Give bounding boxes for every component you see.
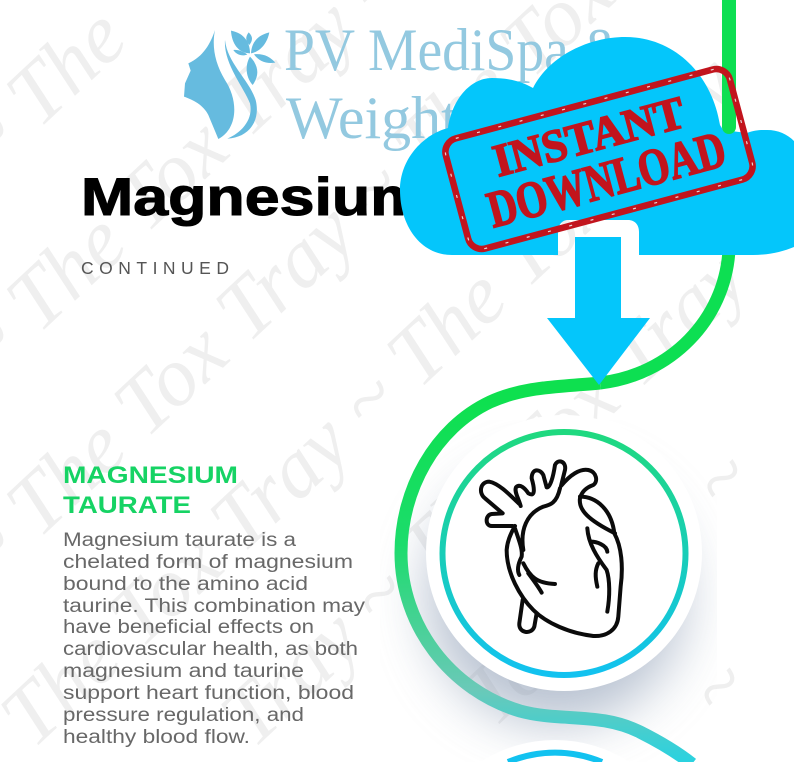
section heading: magnesium taurate: TAURATE xyxy=(63,492,191,519)
circle drop shadow xyxy=(428,468,684,724)
next circle: partial xyxy=(480,740,630,762)
body text: bound to the amino acid xyxy=(63,574,308,595)
stamp: instant download xyxy=(442,66,756,252)
body text xyxy=(63,530,366,748)
heart circle xyxy=(426,415,702,691)
connector line: over cloud end xyxy=(722,0,736,127)
body text: taurine. This combination may xyxy=(63,596,366,617)
logo wordmark line 1: PV MediSpa & xyxy=(284,17,626,83)
watermark pattern: Tox Tray ~ xyxy=(444,429,770,743)
section heading: magnesium taurate: MAGNESIUM xyxy=(63,462,238,489)
stamp: instant download: DOWNLOAD xyxy=(482,121,732,239)
body text: have beneficial effects on xyxy=(63,617,314,638)
body text: magnesium and taurine xyxy=(63,661,304,682)
watermark pattern: ~ xyxy=(671,638,767,737)
logo: PV MediSpa xyxy=(184,17,626,151)
icon: face and leaves xyxy=(184,30,275,139)
instant download badge xyxy=(400,0,794,385)
body text: pressure regulation, and xyxy=(63,705,304,726)
icon: cloud xyxy=(400,37,794,255)
body text: healthy blood flow. xyxy=(63,727,250,748)
body text: support heart function, blood xyxy=(63,683,354,704)
logo wordmark line 2: Weight Loss xyxy=(286,85,586,151)
subtitle: CONTINUED xyxy=(81,258,229,278)
icon: download arrow xyxy=(547,237,650,385)
stamp: instant download: INSTANT xyxy=(488,86,690,186)
section heading: magnesium taurate xyxy=(63,462,238,519)
connector line: gradient curve xyxy=(401,383,692,762)
icon: anatomical heart xyxy=(481,461,622,636)
title: Magnesium xyxy=(81,168,426,227)
body text: Magnesium taurate is a xyxy=(63,530,296,551)
body text: chelated form of magnesium xyxy=(63,552,353,573)
watermark pattern: The Tox Tray ~ The Tox Tray xyxy=(0,35,755,762)
watermark pattern: Tray ~ The Tox Tray xyxy=(203,230,765,762)
connector line: upper green xyxy=(600,250,729,383)
body text: cardiovascular health, as both xyxy=(63,639,358,660)
